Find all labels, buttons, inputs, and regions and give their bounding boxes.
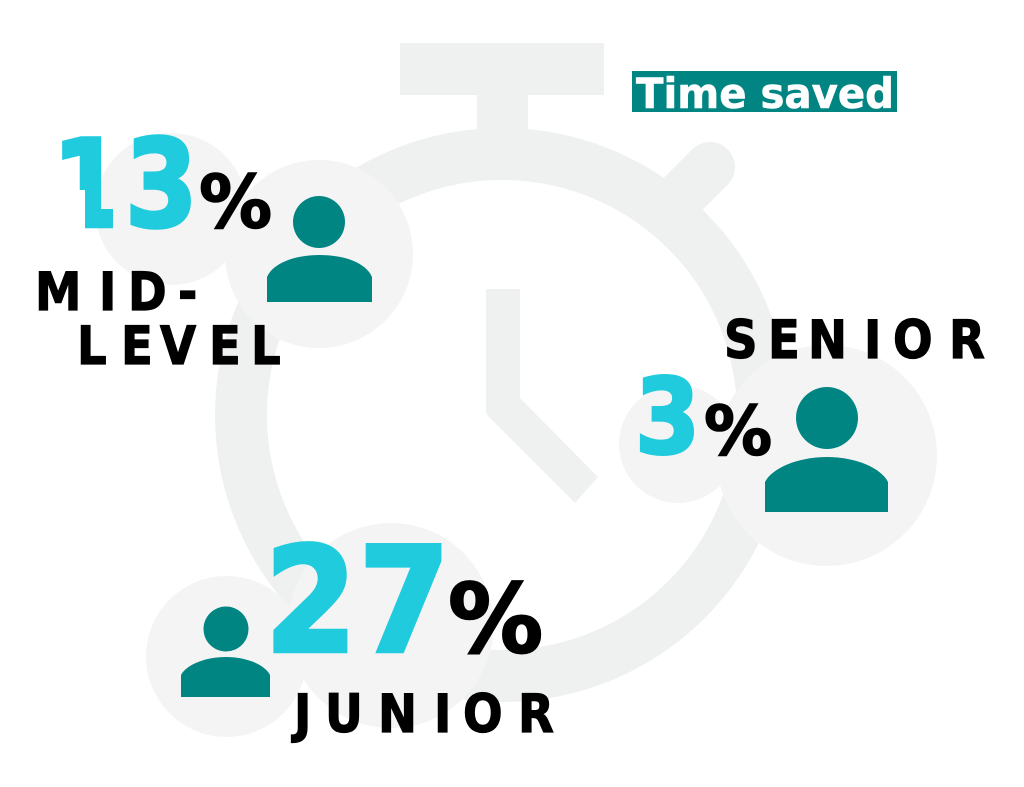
label: mid-level: LEVEL [77, 315, 281, 377]
stat: 13% [62, 134, 271, 230]
icon: junior person [181, 606, 270, 697]
stat: 3%: 3 [635, 357, 700, 478]
label: senior: SENIOR [724, 309, 985, 371]
label: mid-level: MID- [35, 261, 197, 323]
stat: 27%: % [448, 565, 543, 675]
group: junior [146, 516, 554, 745]
stat: 13%: % [199, 160, 272, 246]
stat: 13%: 1 [52, 113, 124, 256]
icon: mid-level person [267, 196, 372, 302]
stat: 27% [265, 516, 543, 686]
icon: stopwatch background [241, 43, 763, 676]
stat: 27%: 2 [265, 516, 357, 686]
stat: 3%: % [704, 392, 772, 472]
badge: Time saved: Time saved [636, 69, 894, 118]
label: junior: JUNIOR [291, 683, 554, 745]
stat: 13%: 3 [125, 114, 198, 255]
group: senior [619, 309, 985, 566]
label: mid-level [35, 261, 281, 377]
icon: senior person [765, 387, 888, 512]
stat: 3% [635, 357, 772, 478]
group: mid-level [38, 133, 413, 365]
stat: 27%: 7 [359, 516, 450, 686]
